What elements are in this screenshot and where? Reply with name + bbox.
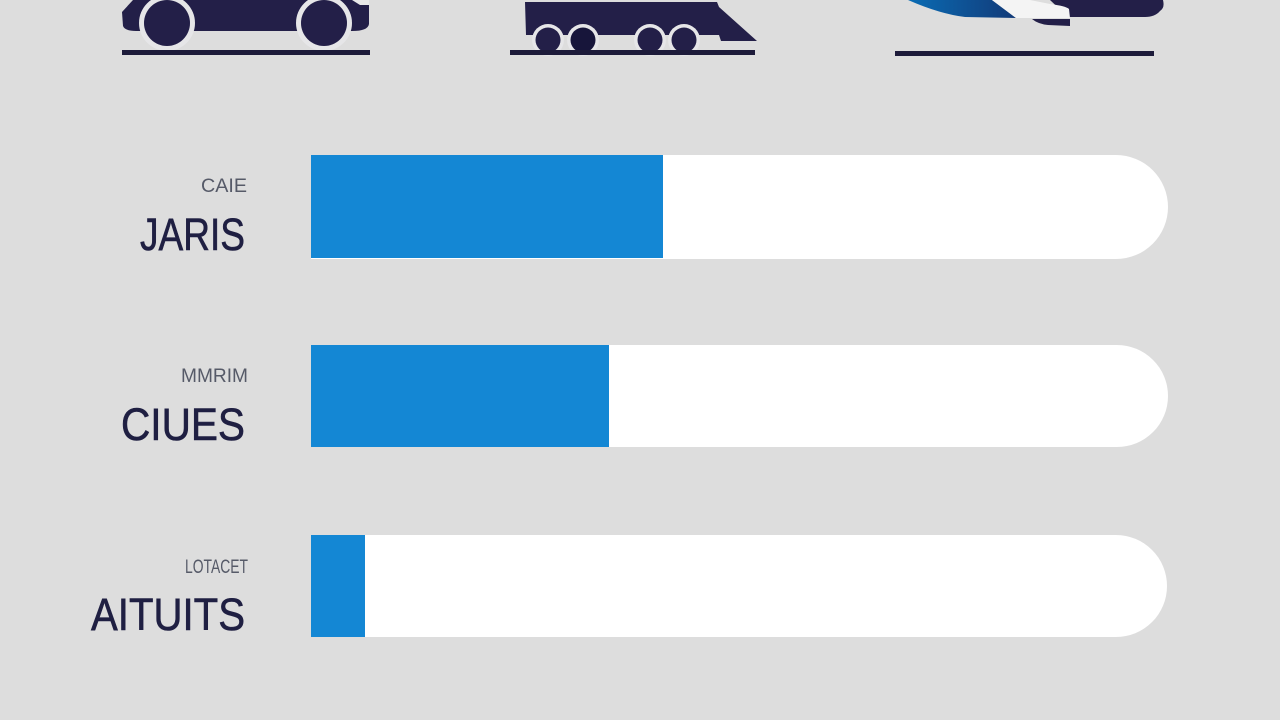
label: row 1: CAIE — [201, 176, 247, 197]
icon: airplane — [895, 0, 1164, 56]
bar: row 1 — [311, 155, 1168, 259]
label: row 2: MMRIM — [181, 366, 248, 387]
label: row 3: AITUITS — [91, 589, 245, 640]
label: row 2 — [121, 366, 248, 450]
label: row 2: CIUES — [121, 399, 245, 450]
label: row 1: JARIS — [140, 209, 245, 260]
label: row 1 — [140, 176, 247, 260]
bar: row 2 — [311, 345, 1168, 447]
icon: car — [122, 0, 370, 55]
icon: truck — [510, 2, 757, 56]
label: row 3: LOTACET — [185, 557, 248, 578]
label: row 3 — [91, 557, 248, 640]
bar: row 3 — [311, 535, 1167, 637]
